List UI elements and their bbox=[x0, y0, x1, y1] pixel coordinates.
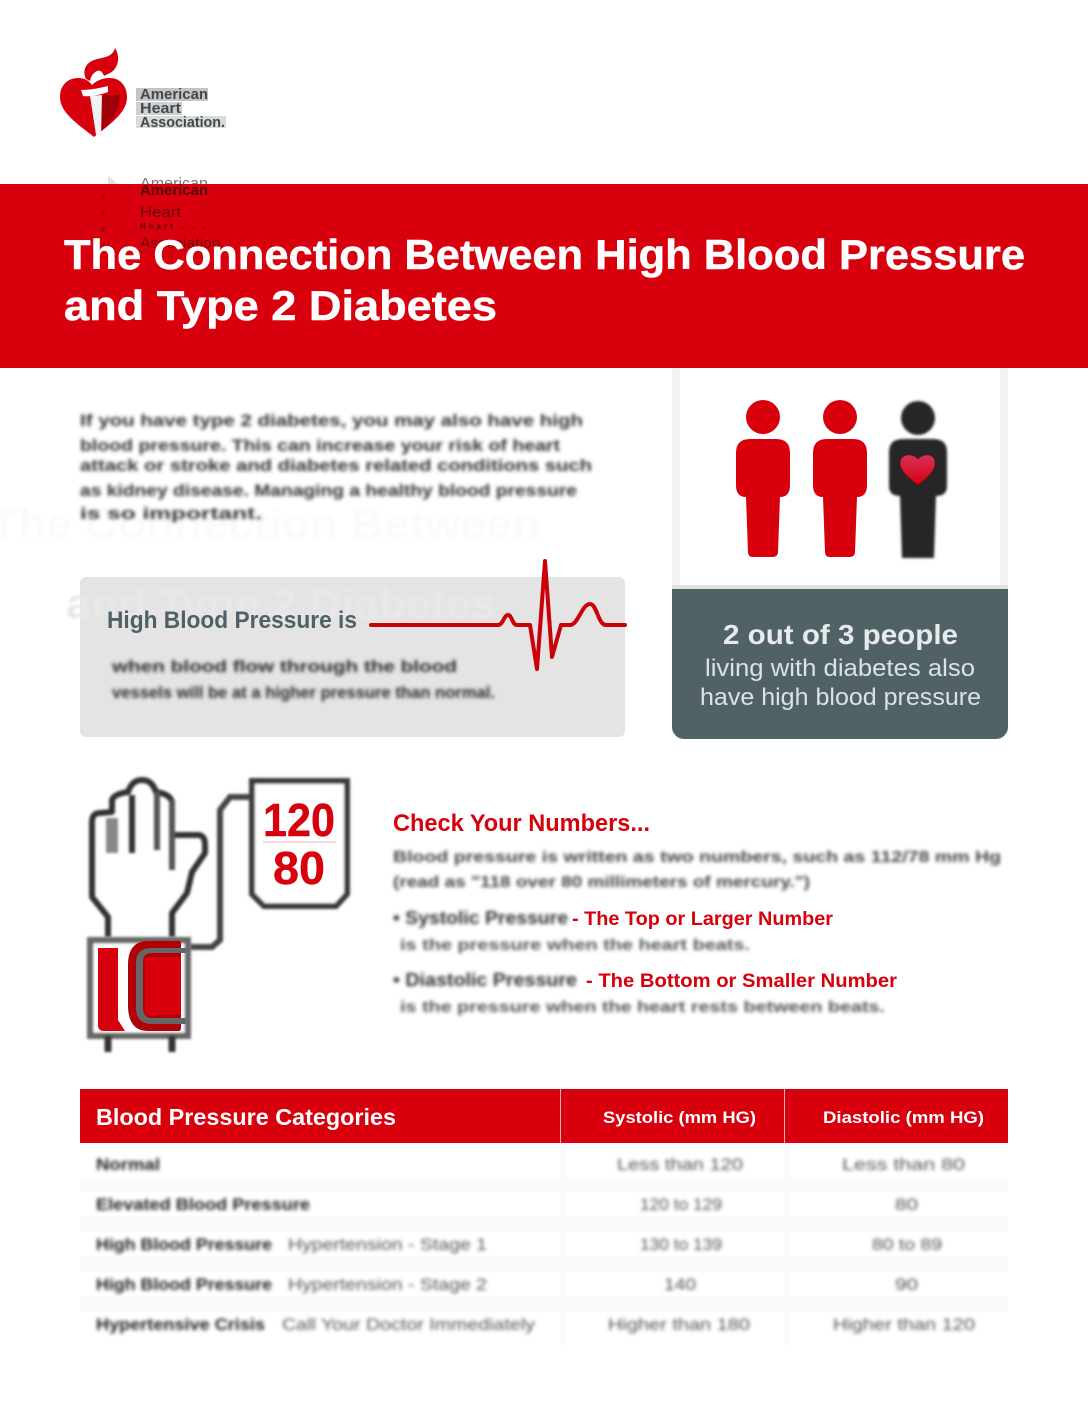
title: The Connection Between High Blood Pressure bbox=[64, 231, 1025, 278]
definition text bbox=[111, 657, 495, 702]
diastolic: • Diastolic Pressure bbox=[393, 970, 577, 990]
monitor: 80 bbox=[273, 842, 325, 894]
diastolic: - The Bottom or Smaller Number bbox=[586, 971, 898, 992]
row: crisis: Higher than 180 bbox=[608, 1315, 750, 1334]
row: stage 2: 140 bbox=[664, 1275, 696, 1294]
wordmark bbox=[136, 87, 226, 131]
table header: Blood Pressure Categories bbox=[96, 1104, 396, 1130]
row: elevated: Elevated Blood Pressure bbox=[96, 1195, 310, 1214]
systolic bbox=[393, 908, 834, 954]
ghost logo text above banner bbox=[108, 176, 208, 192]
explanation text bbox=[393, 849, 1001, 891]
panel: statistic card bbox=[672, 368, 1008, 739]
tube bbox=[190, 797, 252, 947]
stat text bbox=[700, 619, 981, 711]
diastolic bbox=[393, 970, 898, 1016]
wordmark: Association. bbox=[140, 115, 225, 131]
icon: person 2 bbox=[813, 400, 867, 557]
ghost logo text above banner: American bbox=[140, 176, 208, 192]
icon: hand with blood pressure cuff and monitor bbox=[90, 780, 347, 1052]
icon: heart and torch bbox=[60, 48, 127, 137]
row: crisis: Hypertensive Crisis bbox=[96, 1315, 265, 1334]
icon: ECG heartbeat line bbox=[371, 561, 625, 669]
ghost logo text on banner: Association. bbox=[140, 236, 225, 252]
stat text: living with diabetes also bbox=[705, 655, 975, 682]
systolic: is the pressure when the heart beats. bbox=[400, 937, 750, 954]
row: stage 2 bbox=[96, 1275, 918, 1294]
section: check your numbers bbox=[393, 810, 1001, 1016]
logo: American Heart Association bbox=[60, 48, 226, 137]
row: stage 1 bbox=[96, 1235, 942, 1254]
intro paragraph: as kidney disease. Managing a healthy blood pressure bbox=[80, 481, 577, 500]
row: crisis: Higher than 120 bbox=[833, 1315, 975, 1334]
definition text: vessels will be at a higher pressure than normal. bbox=[112, 683, 495, 702]
panel: high blood pressure definition bbox=[66, 577, 625, 737]
table header bbox=[80, 1089, 1008, 1143]
row: stage 2: High Blood Pressure bbox=[96, 1275, 272, 1294]
intro paragraph: attack or stroke and diabetes related conditions such bbox=[80, 456, 592, 475]
intro paragraph: If you have type 2 diabetes, you may also have high bbox=[80, 411, 583, 430]
row: normal bbox=[96, 1155, 965, 1174]
row: stage 1: Hypertension - Stage 1 bbox=[288, 1235, 487, 1254]
wordmark: Heart bbox=[140, 101, 181, 117]
heading: High Blood Pressure is bbox=[107, 607, 357, 634]
row: stage 2: 90 bbox=[895, 1275, 918, 1294]
icon: person with heart bbox=[889, 401, 947, 558]
row: crisis bbox=[96, 1315, 975, 1334]
icon: person 1 bbox=[736, 400, 790, 557]
ghost logo text on banner: Heart bbox=[140, 205, 181, 221]
table header: Diastolic (mm HG) bbox=[823, 1108, 984, 1127]
cuff bbox=[90, 940, 188, 1052]
ghost logo text on banner: Heart . . . bbox=[140, 222, 205, 231]
diastolic: is the pressure when the heart rests between beats. bbox=[400, 999, 885, 1016]
ghost title on white: The Connection Between bbox=[0, 500, 540, 547]
ghost logo text on banner bbox=[103, 183, 225, 252]
row: stage 1: 130 to 139 bbox=[640, 1235, 722, 1254]
explanation text: Blood pressure is written as two numbers, such as 112/78 mm Hg bbox=[393, 849, 1001, 866]
stat text: 2 out of 3 people bbox=[723, 619, 958, 650]
wordmark: American bbox=[140, 87, 208, 103]
row: stage 2: Hypertension - Stage 2 bbox=[288, 1275, 487, 1294]
ghost logo text on banner: American bbox=[140, 183, 208, 199]
definition text: when blood flow through the blood bbox=[111, 657, 457, 676]
row: normal: Less than 120 bbox=[617, 1155, 743, 1174]
row: elevated: 120 to 129 bbox=[640, 1195, 722, 1214]
icon: three people bbox=[736, 400, 947, 558]
row: normal: Normal bbox=[96, 1155, 160, 1174]
table bands bbox=[80, 1143, 1008, 1345]
table: blood pressure categories bbox=[80, 1089, 1008, 1345]
row: elevated bbox=[96, 1195, 918, 1214]
monitor bbox=[252, 781, 347, 906]
monitor: 120 bbox=[263, 794, 335, 846]
title bbox=[64, 231, 1025, 329]
row: elevated: 80 bbox=[895, 1195, 918, 1214]
ghost title in panel: and Type 2 Diabetes bbox=[66, 580, 496, 627]
heading: Check Your Numbers... bbox=[393, 810, 650, 837]
systolic: • Systolic Pressure bbox=[393, 908, 568, 928]
row: normal: Less than 80 bbox=[842, 1155, 965, 1174]
row: stage 1: 80 to 89 bbox=[872, 1235, 942, 1254]
stat text: have high blood pressure bbox=[700, 684, 981, 711]
row: crisis: Call Your Doctor Immediately bbox=[282, 1315, 536, 1334]
explanation text: (read as "118 over 80 millimeters of mercury.") bbox=[393, 874, 810, 891]
intro paragraph: is so important. bbox=[80, 504, 262, 523]
table header: Systolic (mm HG) bbox=[603, 1108, 756, 1127]
title: and Type 2 Diabetes bbox=[64, 282, 497, 329]
intro paragraph bbox=[80, 411, 592, 523]
banner bbox=[0, 183, 1088, 368]
intro paragraph: blood pressure. This can increase your risk of heart bbox=[80, 436, 560, 455]
systolic: - The Top or Larger Number bbox=[572, 909, 834, 930]
hand outline bbox=[92, 780, 205, 937]
row: stage 1: High Blood Pressure bbox=[96, 1235, 272, 1254]
